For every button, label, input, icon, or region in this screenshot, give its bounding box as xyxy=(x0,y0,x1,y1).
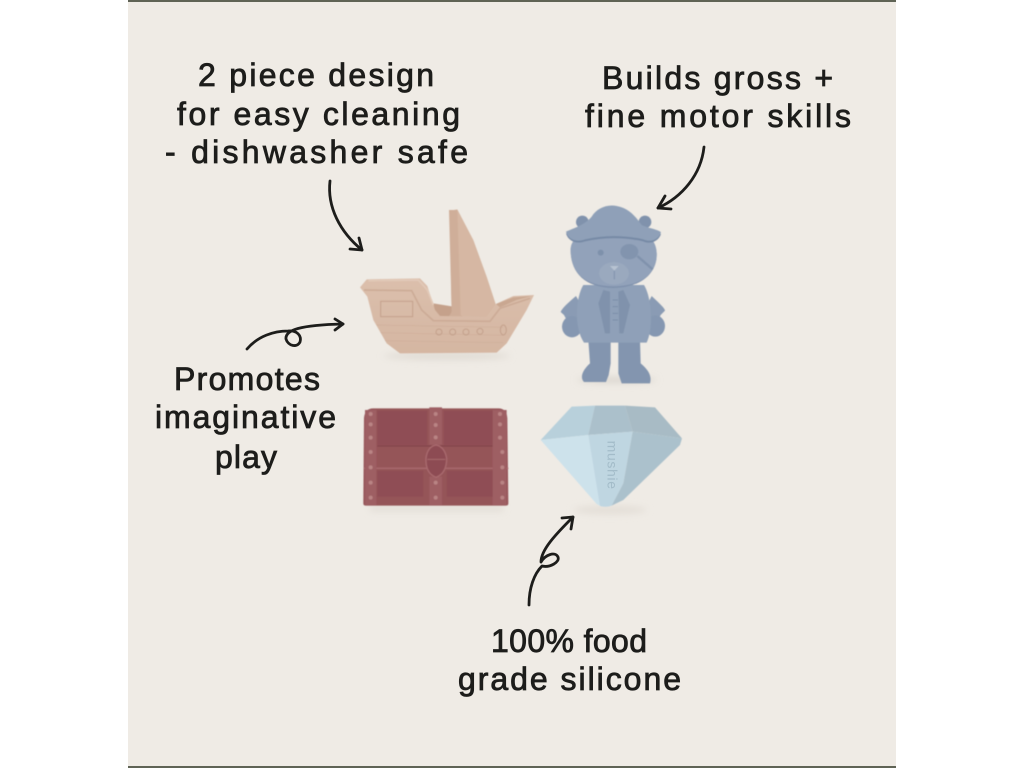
arrow: to ship xyxy=(330,181,362,250)
page background xyxy=(128,0,896,768)
arrow: to ship from left xyxy=(247,319,343,349)
callout: food grade silicone: 100% food xyxy=(491,623,647,659)
callout: motor skills: Builds gross + xyxy=(602,60,833,96)
toy: pirate bear xyxy=(561,206,665,383)
callout: 2 piece design: - dishwasher safe xyxy=(165,134,468,170)
toy: diamond xyxy=(541,406,682,515)
callout: imaginative play: play xyxy=(215,439,277,475)
diamond brand mark: mushie xyxy=(604,441,620,489)
callout: imaginative play: Promotes xyxy=(174,361,320,397)
callout: motor skills: fine motor skills xyxy=(585,98,851,134)
arrow: to bear xyxy=(658,147,704,209)
callout: motor skills xyxy=(585,60,851,134)
toy: treasure chest xyxy=(363,407,508,511)
callout: 2 piece design: for easy cleaning xyxy=(177,96,460,132)
callout: food grade silicone xyxy=(458,623,681,697)
callout: imaginative play xyxy=(155,361,336,475)
toy: ship xyxy=(360,209,534,360)
arrow: to diamond xyxy=(529,517,573,605)
callout: 2 piece design: 2 piece design xyxy=(198,57,434,93)
callout: food grade silicone: grade silicone xyxy=(458,661,681,697)
callout: imaginative play: imaginative xyxy=(155,399,336,435)
callout: 2 piece design xyxy=(165,57,468,170)
